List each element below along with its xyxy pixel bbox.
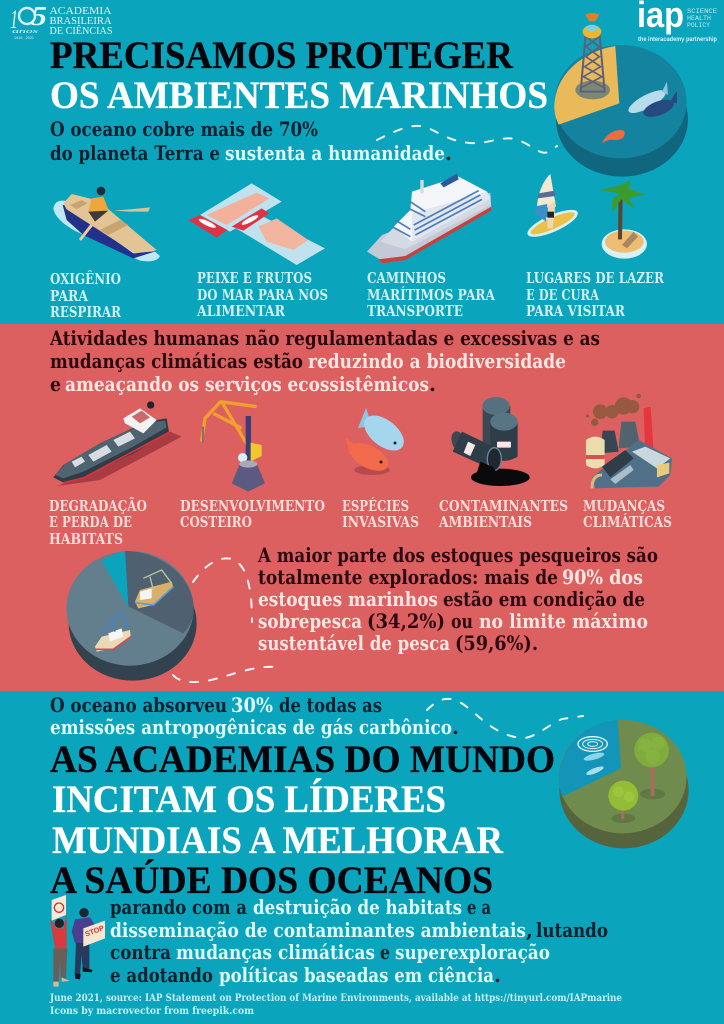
icon: invasive fish <box>345 408 410 477</box>
labels: threats: E PERDA DE <box>49 514 132 531</box>
labels: ocean benefits: ALIMENTAR <box>196 303 286 320</box>
title: academies call: A SAÚDE DOS OCEANOS <box>50 858 493 902</box>
text: call to action detail: políticas baseadas em ciência <box>219 963 494 987</box>
title: academies call: INCITAM OS LÍDERES <box>52 777 446 821</box>
icon: fishing boat lower <box>95 612 131 652</box>
labels: ocean benefits: PEIXE E FRUTOS <box>197 270 312 287</box>
icon: polluting factory <box>586 394 672 488</box>
text: ocean coverage: O oceano cobre mais de 70% <box>50 117 318 141</box>
text: human activities <box>49 326 600 396</box>
icon: shrimp <box>602 130 625 143</box>
logo: iap <box>637 0 717 43</box>
text: carbon absorption: emissões antropogênicas de gás carbônico <box>50 715 452 739</box>
icon: protesters <box>50 895 105 987</box>
text: fish stocks: (34,2%) <box>367 609 445 633</box>
icon: crane <box>202 402 265 492</box>
labels: threats: INVASIVAS <box>342 514 419 531</box>
panel: ocean services <box>0 0 724 324</box>
text: call to action detail: , <box>526 918 533 942</box>
icon: fishing boat upper <box>135 570 173 608</box>
text: fish stocks: 90% dos <box>562 565 643 589</box>
text: ocean coverage: sustenta a humanidade <box>225 141 445 165</box>
text: call to action detail: mudanças climáticas <box>176 940 375 964</box>
logo: Academia Brasileira de Ciências: 1916 - 2021 <box>14 35 35 40</box>
text: fish stocks: ou <box>451 609 473 633</box>
text: fish stocks <box>257 543 658 655</box>
labels: threats: CONTAMINANTES <box>439 498 568 515</box>
text: ocean coverage <box>50 117 452 165</box>
icon: small tree <box>608 781 638 823</box>
text: carbon absorption: . <box>452 715 459 739</box>
labels: ocean benefits: OXIGÊNIO <box>50 270 121 288</box>
text: fish stocks: sustentável de pesca <box>258 631 450 655</box>
text: call to action detail: e a <box>467 895 491 919</box>
icon: large tree <box>634 733 669 799</box>
labels: threats: ESPÉCIES <box>342 497 409 515</box>
text: fish stocks: sobrepesca <box>258 609 362 633</box>
text: human activities: reduzindo a biodiversidade <box>308 349 566 373</box>
logo: Academia Brasileira de Ciências <box>10 1 113 40</box>
text: fish stocks: (59,6%). <box>455 631 538 655</box>
dashed connector to pie <box>377 126 557 153</box>
labels: ocean benefits: PARA VISITAR <box>526 303 626 320</box>
panel: call to action <box>0 691 724 1024</box>
text: human activities: ameaçando os serviços ecossistêmicos <box>65 372 429 396</box>
icon: fish <box>626 82 677 120</box>
title: academies call: MUNDIAIS A MELHORAR <box>52 818 503 862</box>
text: fish stocks: estão em condição de <box>443 587 645 611</box>
logo: Academia Brasileira de Ciências: BRASILEIRA <box>50 16 112 27</box>
text: carbon absorption <box>50 693 459 739</box>
dashed connector to pie <box>427 699 583 738</box>
text: carbon absorption: O oceano absorveu <box>50 693 227 717</box>
labels: threats <box>49 496 672 548</box>
labels: threats: CLIMÁTICAS <box>583 513 672 531</box>
icon: whirlpool and dolphins <box>578 737 607 777</box>
icon: windsurfer <box>524 174 581 242</box>
title: PRECISAMOS PROTEGER <box>50 33 513 77</box>
text: carbon absorption: de todas as <box>279 693 382 717</box>
text: call to action detail: e <box>380 940 390 964</box>
labels: ocean benefits: PARA <box>50 288 89 305</box>
text: ocean coverage: do planeta Terra e <box>50 141 220 165</box>
text: call to action detail: lutando <box>536 918 608 942</box>
title: OS AMBIENTES MARINHOS <box>50 73 548 117</box>
labels: threats: DESENVOLVIMENTO <box>180 498 325 515</box>
text: carbon absorption: 30% <box>231 693 273 717</box>
labels: ocean benefits: CAMINHOS <box>367 270 446 287</box>
labels: threats: COSTEIRO <box>180 514 252 531</box>
icon: rowing boat <box>53 187 160 261</box>
icon: oil barrels <box>449 397 530 486</box>
labels: ocean benefits: MARÍTIMOS PARA <box>367 286 496 304</box>
labels: ocean benefits: E DE CURA <box>526 287 600 304</box>
text: human activities: mudanças climáticas estão <box>50 349 303 373</box>
icon: oil tanker <box>53 401 182 486</box>
text: human activities: e <box>50 372 61 396</box>
icon: protesters: STOP <box>84 923 105 939</box>
pie chart: ocean uses <box>554 13 688 177</box>
text: call to action detail: e adotando <box>110 963 213 987</box>
logo: Academia Brasileira de Ciências: ACADEMIA <box>50 6 112 17</box>
icon: oil platform <box>575 13 610 99</box>
logo: Academia Brasileira de Ciências: 5 <box>31 1 47 31</box>
text: call to action detail: contra <box>110 940 171 964</box>
text: fish stocks: estoques marinhos <box>258 587 438 611</box>
logo: iap: HEALTH <box>687 15 711 22</box>
logo: iap: SCIENCE <box>687 8 717 15</box>
labels: ocean benefits: LUGARES DE LAZER <box>526 270 665 287</box>
title <box>50 33 548 117</box>
logo: Academia Brasileira de Ciências: 1 <box>10 5 18 34</box>
logo: iap: POLICY <box>687 22 710 29</box>
pie chart: fish stocks <box>66 551 197 681</box>
title: academies call <box>50 737 555 902</box>
text: call to action detail: destruição de habitats <box>253 895 462 919</box>
labels: threats: MUDANÇAS <box>583 498 665 515</box>
title: academies call: AS ACADEMIAS DO MUNDO <box>50 737 555 781</box>
pie chart: carbon <box>559 720 689 848</box>
text: call to action detail <box>110 895 608 987</box>
text: call to action detail: . <box>494 963 501 987</box>
text: fish stocks: A maior parte dos estoques pesqueiros são <box>257 543 658 567</box>
icon: palm island <box>599 180 647 259</box>
icon: cruise ship <box>367 173 491 263</box>
logo: Academia Brasileira de Ciências: DE CIÊNCIAS <box>50 25 113 37</box>
text: human activities: Atividades humanas não regulamentadas e excessivas e as <box>49 326 600 350</box>
labels: threats: AMBIENTAIS <box>438 514 532 531</box>
text: call to action detail: superexploração <box>395 940 550 964</box>
logo: Academia Brasileira de Ciências: anos <box>12 29 40 35</box>
labels: ocean benefits: RESPIRAR <box>50 304 122 321</box>
footer: source and credits <box>49 992 622 1017</box>
text: fish stocks: no limite máximo <box>479 609 648 633</box>
footer: source and credits: Icons by macrovector from freepik.com <box>50 1005 254 1017</box>
labels: threats: DEGRADAÇÃO <box>49 496 147 515</box>
text: ocean coverage: . <box>445 141 452 165</box>
footer: source and credits: June 2021, source: IAP Statement on Protection of Marine Environments, available at https://tinyurl.com/IAPmarine <box>49 992 622 1004</box>
labels: ocean benefits: DO MAR PARA NOS <box>197 287 328 304</box>
icon: fish trays <box>188 183 325 265</box>
labels: ocean benefits: TRANSPORTE <box>367 303 463 320</box>
text: call to action detail: disseminação de contaminantes ambientais <box>110 918 526 942</box>
labels: ocean benefits <box>50 270 665 321</box>
labels: threats: HABITATS <box>49 531 123 548</box>
text: human activities: . <box>429 372 436 396</box>
text: call to action detail: parando com a <box>110 895 247 919</box>
text: fish stocks: totalmente explorados: mais de <box>258 565 558 589</box>
panel: threats <box>0 324 724 691</box>
dashed connector around fish stocks text <box>173 558 280 682</box>
